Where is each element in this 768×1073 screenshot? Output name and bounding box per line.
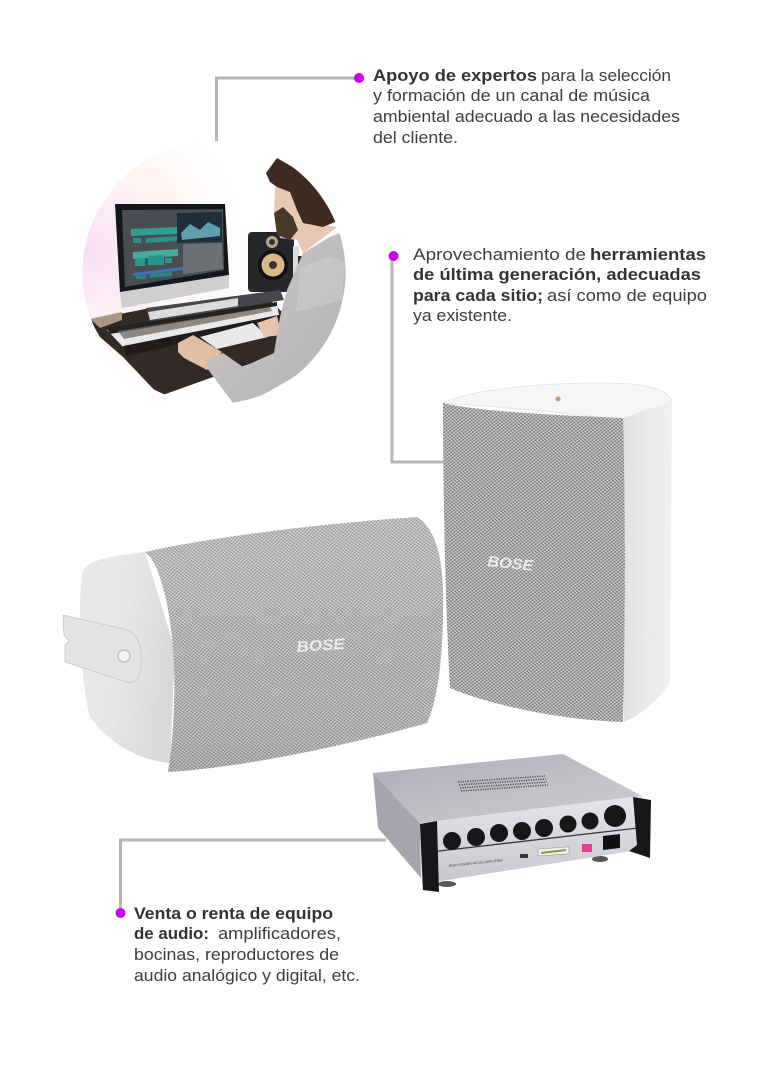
horizontal speaker cap: [80, 552, 175, 763]
amplifier: [373, 754, 651, 892]
text block: tools: [413, 246, 707, 325]
bracket screw: [118, 650, 130, 662]
text block: expert support: ambiental adecuado a las necesidades: [373, 108, 680, 126]
monitor: [115, 204, 229, 308]
horizontal speaker logo: BOSE: [296, 636, 346, 656]
connector: tools line: [392, 256, 446, 462]
right handle: [629, 797, 651, 858]
speaker logo: BOSE: [487, 553, 535, 575]
man hair: [266, 158, 340, 227]
desk: [90, 300, 290, 396]
text block: audio equipment: amplificadores,: [218, 925, 341, 943]
bullet dot 1: [354, 73, 364, 83]
text block: expert support: y formación de un canal de música: [373, 87, 651, 105]
text block: audio equipment: [134, 905, 360, 985]
speaker: horizontal white speaker: [63, 517, 443, 772]
amplifier top: [373, 754, 642, 823]
text block: tools: ya existente.: [413, 307, 512, 325]
text block: audio equipment: de audio:: [134, 925, 209, 943]
hand left: [178, 335, 222, 370]
amplifier vent: [458, 776, 548, 791]
music keyboard: [107, 290, 284, 356]
panel divider: [422, 828, 638, 853]
computer keyboard: [200, 323, 268, 349]
model label: HIGH POWER AC-DC AMPLIFIER: [449, 858, 503, 868]
mounting bracket: [63, 615, 141, 682]
text block: tools: de última generación, adecuadas: [413, 266, 701, 284]
photo: music producer at studio desk: [80, 140, 350, 408]
connector: audio equipment line: [120, 840, 386, 908]
bullet dot 2: [388, 251, 398, 261]
bullet dot 3: [116, 908, 126, 918]
connector: expert support line: [216, 78, 358, 142]
hand right: [257, 316, 279, 337]
text block: expert support: [373, 67, 680, 147]
man neck and face: [274, 187, 337, 253]
text block: audio equipment: audio analógico y digital, etc.: [134, 967, 360, 985]
text block: audio equipment: bocinas, reproductores de: [134, 946, 339, 964]
speaker side panel: [623, 401, 672, 722]
text block: expert support: Apoyo de expertos: [373, 67, 537, 85]
black socket: [603, 834, 620, 850]
amplifier knobs: [443, 805, 626, 850]
horizontal speaker mesh grille: [145, 517, 443, 772]
text block: expert support: para la selección: [541, 67, 671, 85]
text block: tools: herramientas: [590, 246, 706, 264]
top screw: [556, 396, 560, 402]
text block: tools: Aprovechamiento de: [413, 246, 586, 264]
amplifier feet: [438, 856, 608, 887]
amplifier side: [373, 773, 421, 878]
speaker top cap: [443, 383, 672, 420]
level meter: [538, 847, 569, 856]
pink power button: [582, 844, 592, 852]
amplifier front panel: [420, 796, 642, 884]
speaker: upright white speaker: [443, 383, 672, 722]
studio speaker: [248, 232, 304, 292]
left handle: [420, 821, 439, 892]
text block: expert support: del cliente.: [373, 129, 458, 147]
speaker mesh grille: [443, 403, 625, 722]
selector switch: [520, 854, 528, 858]
text block: audio equipment: Venta o renta de equipo: [134, 905, 333, 923]
text block: tools: para cada sitio;: [413, 287, 543, 305]
text block: tools: así como de equipo: [547, 287, 707, 305]
man sweater: [207, 233, 350, 408]
